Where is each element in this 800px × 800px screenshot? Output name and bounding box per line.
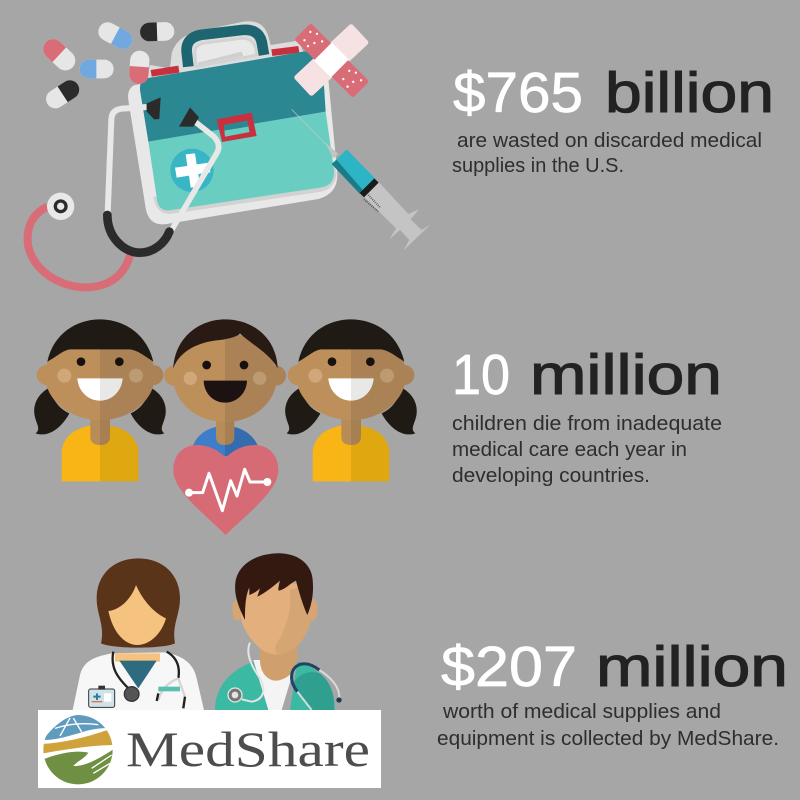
panel: MedShare logo [38,710,381,788]
icon: girl left [34,319,166,481]
heading: 10 million [452,343,722,407]
logo wordmark: MedShare [126,721,370,777]
icon: pills [39,19,175,112]
heading: 10 million: million [530,343,722,407]
icon: globe and hand [40,715,115,787]
heading: $765 billion [453,61,774,125]
icon: syringe [292,109,431,251]
text block: MedShare collection [437,700,779,750]
icon: kit body [128,51,337,224]
heading: $765 billion: billion [605,61,774,125]
icon: female doctor [73,558,204,710]
heading: 10 million: 10 [452,343,510,407]
icon: heart with pulse [173,445,278,535]
text block: MedShare collection: worth of medical supplies and [442,700,721,723]
heading: $207 million: $207 [441,635,577,699]
text block: children die [452,412,722,487]
heading: $207 million: million [596,635,788,699]
illustration: doctors and MedShare logo [38,553,381,788]
illustration: three children with heart [34,319,417,535]
illustration: first aid kit with stethoscope, pills, bandage and syringe [28,19,431,287]
heading: $207 million [441,635,788,699]
icon: boy [164,319,286,457]
icon: stethoscope [28,97,219,287]
icon: bandage [293,22,370,99]
text block: discarded supplies [452,129,762,177]
text block: children die: medical care each year in [452,438,687,461]
text block: MedShare collection: equipment is collected by MedShare. [437,727,779,750]
icon: male doctor [215,553,342,710]
text block: discarded supplies: supplies in the U.S. [452,154,624,177]
icon: girl right [285,319,417,481]
icon: pill on kit [129,50,150,85]
heading: $765 billion: $765 [453,61,583,125]
text block: children die: developing countries. [452,464,650,487]
text block: children die: children die from inadequate [452,412,722,435]
text block: discarded supplies: are wasted on discarded medical [457,129,762,152]
icon: kit handle [147,21,303,80]
